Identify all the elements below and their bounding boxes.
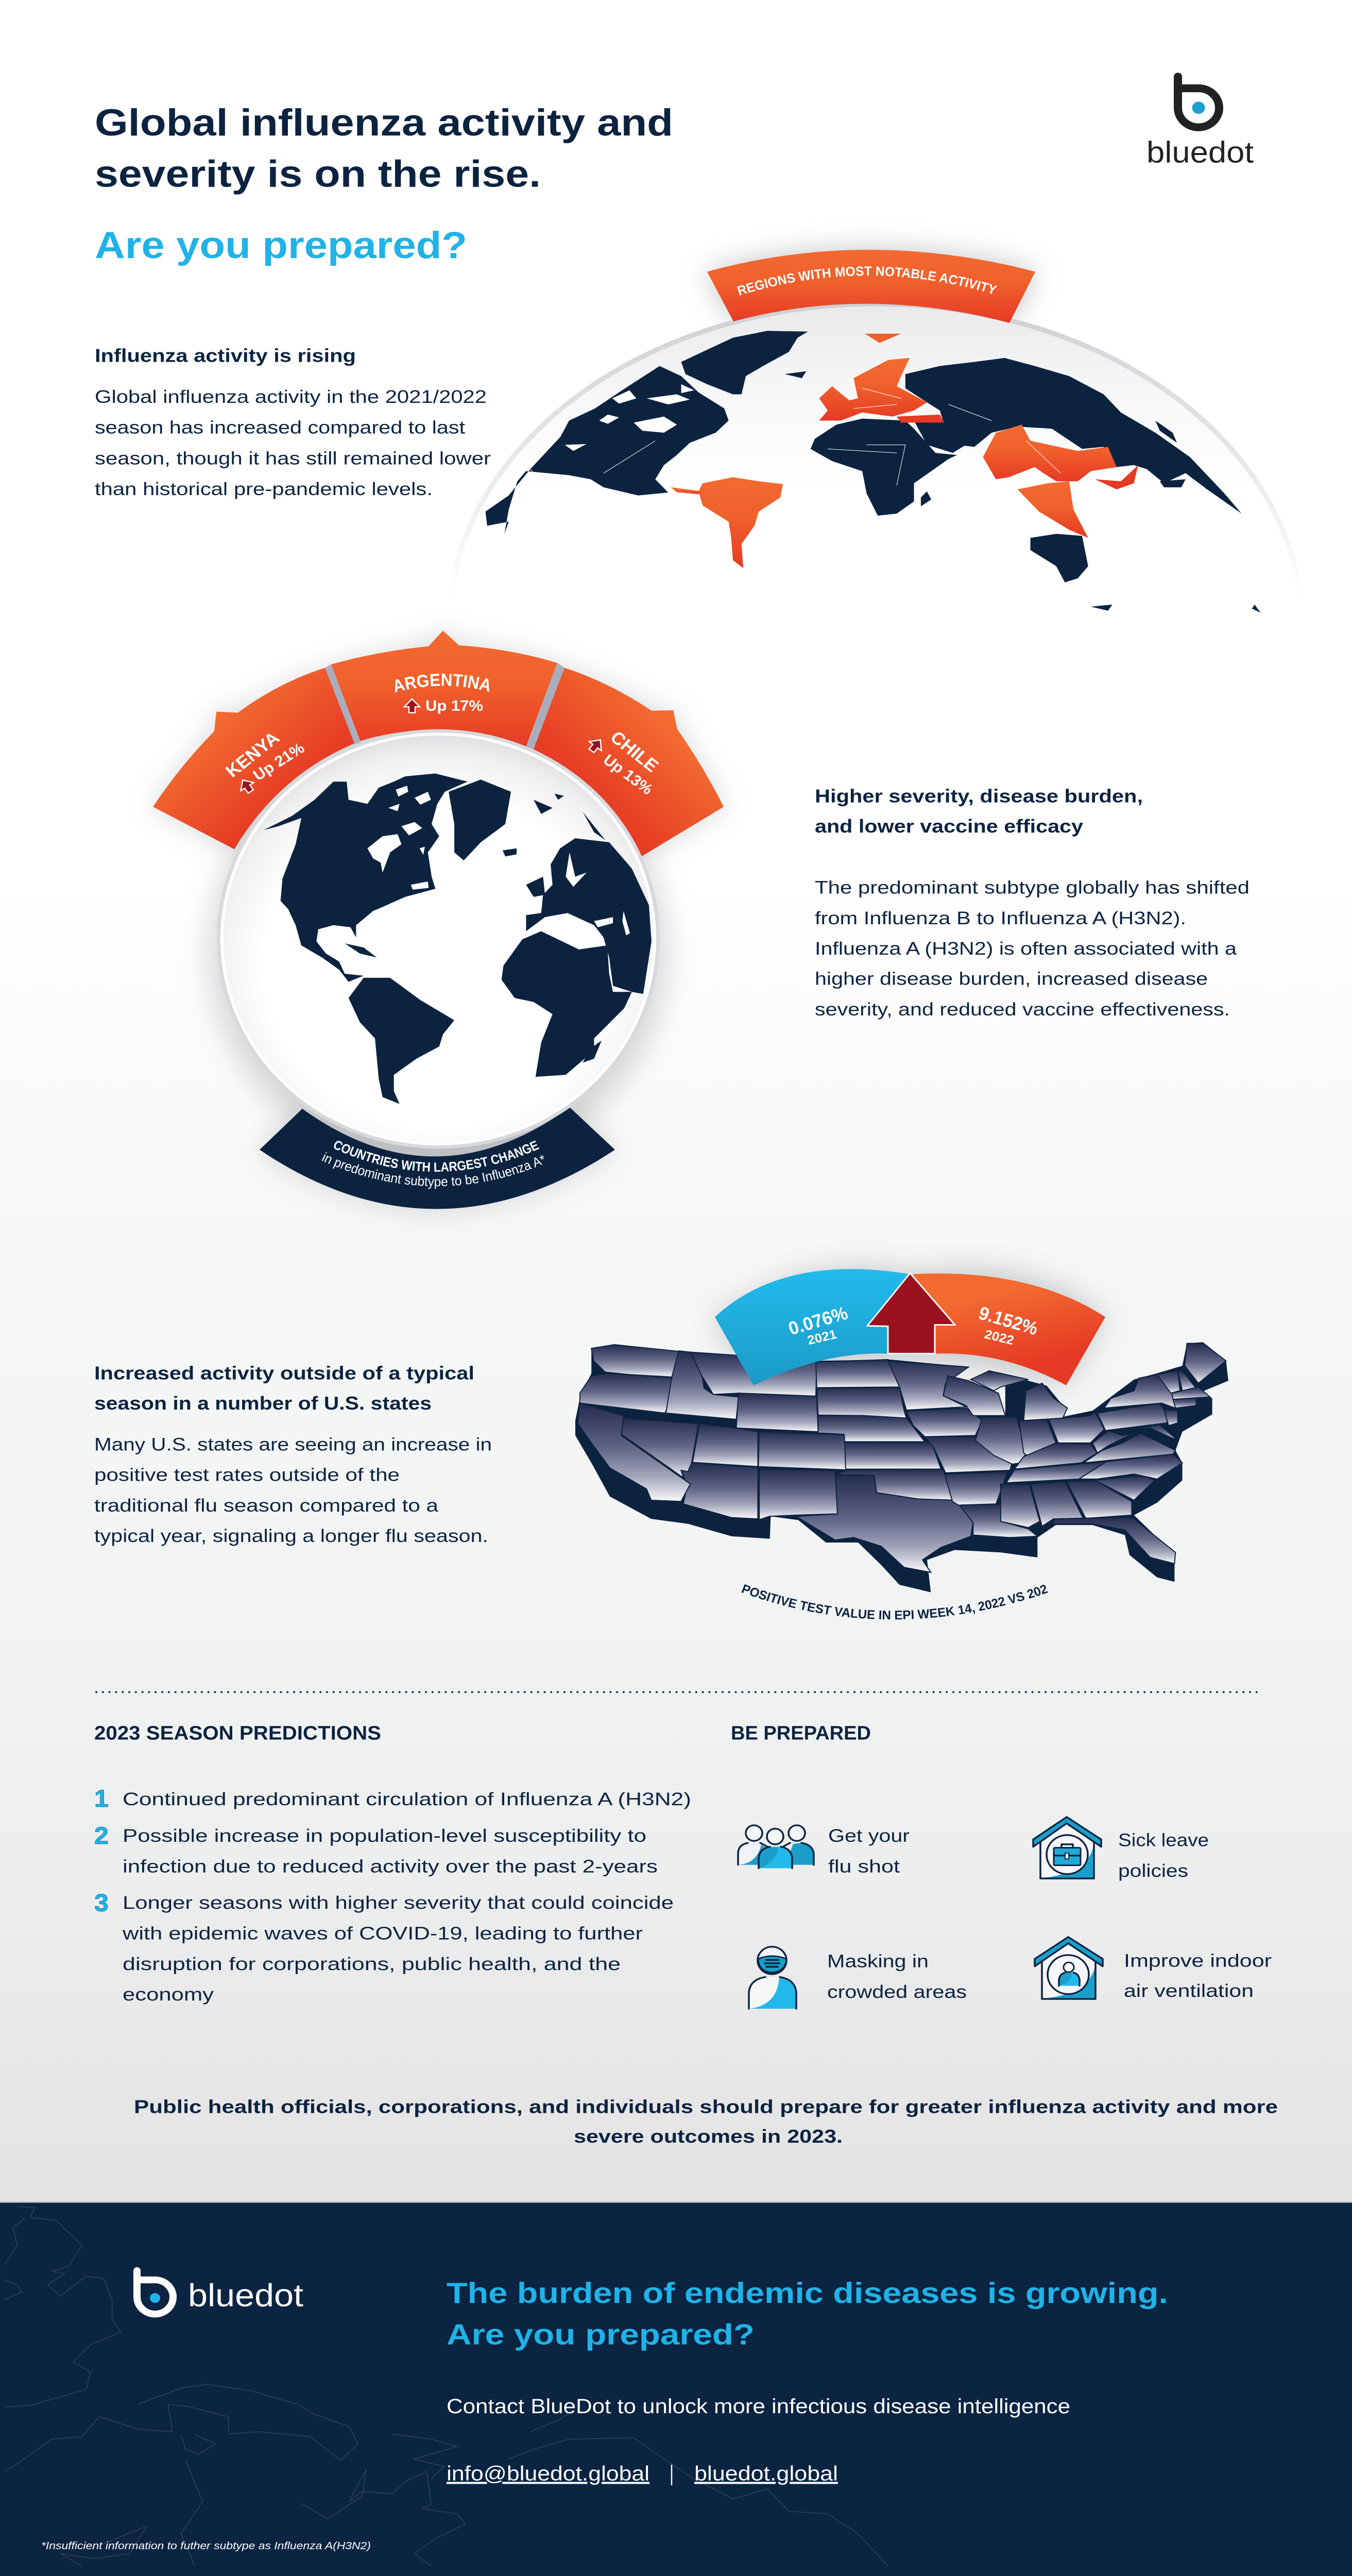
segment: Kenya: KENYA [222, 728, 283, 781]
logo: bluedot top right [1146, 77, 1254, 169]
text block: increased activity: typical year, signaling a longer flu season. [94, 1526, 488, 1546]
icon: people flu shot [738, 1825, 814, 1868]
segment: Argentina: Up 17% [425, 698, 483, 714]
text block: increased activity: Many U.S. states are seeing an increase in [94, 1434, 492, 1455]
segment: Argentina [331, 631, 557, 747]
text block: higher severity: The predominant subtype globally has shifted [815, 877, 1250, 897]
banner: 2021 value [715, 1269, 909, 1385]
label: improve indoor air ventilation: air ventilation [1124, 1980, 1254, 2001]
segment: Kenya: Up 21% [250, 740, 308, 784]
title: severity is on the rise. [95, 153, 541, 195]
text block: higher severity: severity, and reduced vaccine effectiveness. [815, 999, 1230, 1020]
icon: house with briefcase [1033, 1817, 1101, 1878]
icon: up arrow [586, 736, 606, 755]
closing statement: Public health officials, corporations, and individuals should prepare for greater influenza activity and more [134, 2096, 1278, 2117]
text block: increased activity: Increased activity outside of a typical [94, 1363, 474, 1383]
map: globe continents [264, 773, 652, 1104]
prediction 2: 2 [94, 1822, 109, 1850]
icon: house with person [1035, 1937, 1103, 1999]
closing statement: severe outcomes in 2023. [574, 2126, 843, 2147]
label: sick leave policies: Sick leave [1118, 1830, 1209, 1850]
closing statement [134, 2096, 1278, 2147]
segment: Kenya [153, 668, 354, 849]
icon: person with mask [749, 1947, 796, 2009]
prediction 3: 3 [94, 1890, 109, 1917]
caption: positive test value: POSITIVE TEST VALUE IN EPI WEEK 14, 2022 VS 2021 [742, 1584, 1048, 1620]
text block: influenza activity is rising [95, 345, 491, 499]
banner: 2022 value: 9.152% [976, 1302, 1040, 1339]
banner: 2021 value: 0.076% [786, 1302, 850, 1339]
footer heading: The burden of endemic diseases is growing. [447, 2277, 1168, 2309]
text block: influenza activity is rising: season, though it has still remained lower [95, 448, 491, 468]
panel: world dome map [427, 235, 1294, 958]
logo: bluedot top right: bluedot [1146, 135, 1254, 169]
icon: up arrow [404, 699, 420, 713]
title: Global influenza activity and [95, 101, 673, 144]
map: dome continents [486, 331, 1261, 613]
logo: bluedot footer [137, 2270, 303, 2314]
text block: increased activity: traditional flu season compared to a [94, 1495, 439, 1516]
prediction 2: Possible increase in population-level susceptibility to [123, 1825, 646, 1846]
segment: Argentina: ARGENTINA [395, 674, 489, 692]
label: get your flu shot: flu shot [828, 1856, 900, 1877]
label: improve indoor air ventilation: Improve indoor [1124, 1950, 1272, 1971]
panel: 2023 season predictions: 2023 SEASON PREDICTIONS [94, 1722, 381, 1744]
prediction 3: disruption for corporations, public health, and the [123, 1954, 621, 1974]
prediction 1: Continued predominant circulation of Influenza A (H3N2) [123, 1789, 691, 1809]
prediction 3: Longer seasons with higher severity that could coincide [123, 1892, 674, 1913]
text block: higher severity: Higher severity, disease burden, [815, 786, 1143, 806]
footer contact line: Contact BlueDot to unlock more infectious disease intelligence [447, 2395, 1070, 2418]
text block: influenza activity is rising: season has increased compared to last [95, 417, 465, 437]
banner: 2022 value [913, 1274, 1105, 1385]
panel: be prepared: BE PREPARED [731, 1722, 871, 1744]
title [95, 101, 673, 195]
icon: up arrow [236, 776, 257, 795]
panel: be prepared [731, 1722, 1272, 2009]
footer links: info@bluedot.global [447, 2462, 649, 2485]
label: masking in crowded areas: Masking in [827, 1951, 929, 1971]
crescent: countries with largest change: COUNTRIES WITH LARGEST CHANGE [334, 1141, 540, 1172]
panel: 2023 season predictions [94, 1722, 691, 2005]
divider: dotted [96, 1691, 1258, 1693]
text block: influenza activity is rising: Influenza activity is rising [95, 345, 356, 366]
text block: influenza activity is rising: than historical pre-pandemic levels. [95, 479, 433, 499]
label: get your flu shot: Get your [828, 1825, 910, 1846]
label: improve indoor air ventilation [1124, 1950, 1272, 2001]
crescent: countries with largest change [260, 1108, 615, 1209]
footer heading [447, 2277, 1168, 2351]
footer links [447, 2462, 838, 2485]
banner: 2022 value: 2022 [983, 1327, 1016, 1348]
banner: 2021 value: 2021 [806, 1327, 838, 1348]
segment: Chile: CHILE [606, 727, 662, 776]
footer links: bluedot.global [694, 2462, 838, 2485]
prediction 2: infection due to reduced activity over the past 2-years [123, 1856, 658, 1877]
text block: increased activity: season in a number of U.S. states [94, 1393, 432, 1414]
text block: increased activity: positive test rates outside of the [94, 1464, 400, 1485]
label: masking in crowded areas [827, 1951, 967, 2002]
prediction 3: economy [123, 1984, 214, 2005]
text block: higher severity: and lower vaccine efficacy [815, 816, 1083, 837]
segment: Chile [534, 668, 724, 857]
label: sick leave policies: policies [1118, 1860, 1188, 1881]
text block: higher severity: Influenza A (H3N2) is often associated with a [815, 938, 1237, 959]
text block: higher severity: higher disease burden, increased disease [815, 968, 1208, 989]
separators between segments [325, 663, 564, 750]
segment: Chile: Up 13% [600, 752, 656, 798]
footer heading: Are you prepared? [447, 2318, 755, 2351]
globe disc [219, 731, 658, 1147]
text block: higher severity: from Influenza B to Influenza A (H3N2). [815, 908, 1186, 928]
logo: bluedot footer: bluedot [188, 2277, 303, 2313]
banner: regions with most notable activity: REGIONS WITH MOST NOTABLE ACTIVITY [737, 266, 997, 296]
footnote: *Insufficient information to futher subtype as Influenza A(H3N2) [41, 2540, 371, 2552]
prediction 1 [94, 1785, 691, 1812]
text block: increased activity [94, 1363, 492, 1546]
text block: influenza activity is rising: Global influenza activity in the 2021/2022 [95, 386, 487, 407]
arrow: increase [867, 1273, 955, 1353]
prediction 3: with epidemic waves of COVID-19, leading to further [122, 1923, 643, 1943]
label: masking in crowded areas: crowded areas [827, 1981, 967, 2002]
subtitle: are you prepared: Are you prepared? [95, 224, 467, 266]
banner: regions with most notable activity [707, 249, 1035, 323]
map: US states with extrusion [575, 1342, 1228, 1592]
panel: globe with country change [151, 628, 727, 1219]
text block: higher severity [815, 786, 1250, 1020]
prediction 2 [94, 1822, 658, 1877]
panel: US map [575, 1256, 1228, 1620]
prediction 1: 1 [94, 1785, 109, 1812]
label: sick leave policies [1118, 1830, 1209, 1881]
prediction 3 [94, 1890, 674, 2005]
label: get your flu shot [828, 1825, 910, 1877]
footer panel [0, 2202, 1352, 2576]
crescent: countries with largest change: in predominant subtype to be Influenza A* [321, 1152, 544, 1189]
